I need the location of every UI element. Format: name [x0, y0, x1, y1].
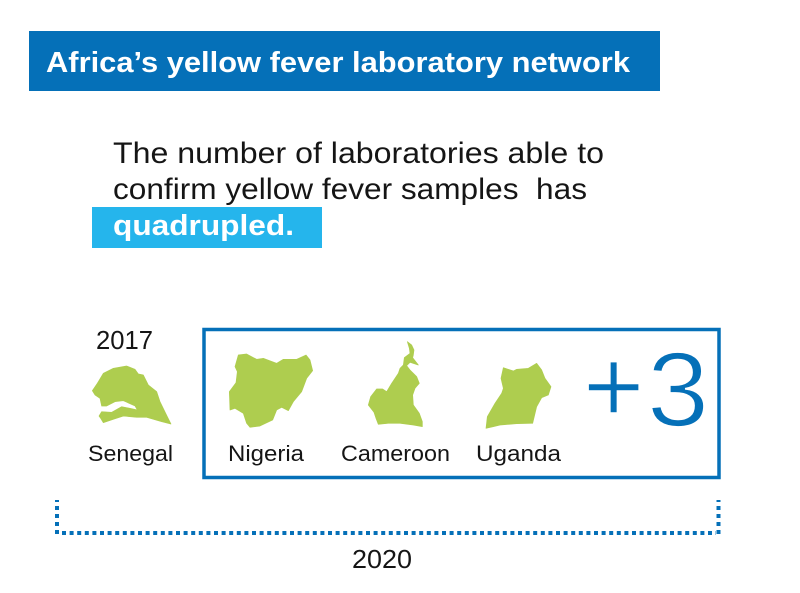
intro text block: confirm yellow fever samples has	[113, 173, 587, 206]
map: Cameroon	[368, 342, 422, 427]
title banner: Africa’s yellow fever laboratory network	[46, 47, 631, 79]
intro text block	[113, 137, 604, 206]
title banner	[29, 31, 660, 91]
bracket: 2020 span	[57, 500, 718, 535]
big number: +3	[583, 328, 709, 449]
panel: 2020 added countries	[204, 328, 719, 478]
label: Cameroon: Cameroon	[341, 441, 450, 466]
big number: +3: 3	[647, 331, 709, 449]
big number: +3: +	[583, 328, 644, 445]
label: Senegal: Senegal	[88, 441, 173, 466]
highlight: quadrupled	[92, 207, 322, 248]
label: Nigeria: Nigeria	[228, 441, 305, 466]
map: Nigeria	[229, 354, 313, 427]
year label 2017: 2017	[96, 325, 153, 355]
highlight: quadrupled: quadrupled.	[113, 210, 294, 242]
intro text block: The number of laboratories able to	[113, 137, 604, 170]
map: Uganda	[486, 363, 551, 428]
label: Uganda: Uganda	[476, 441, 562, 466]
map: Senegal	[92, 366, 171, 424]
year label 2020: 2020	[352, 544, 412, 574]
